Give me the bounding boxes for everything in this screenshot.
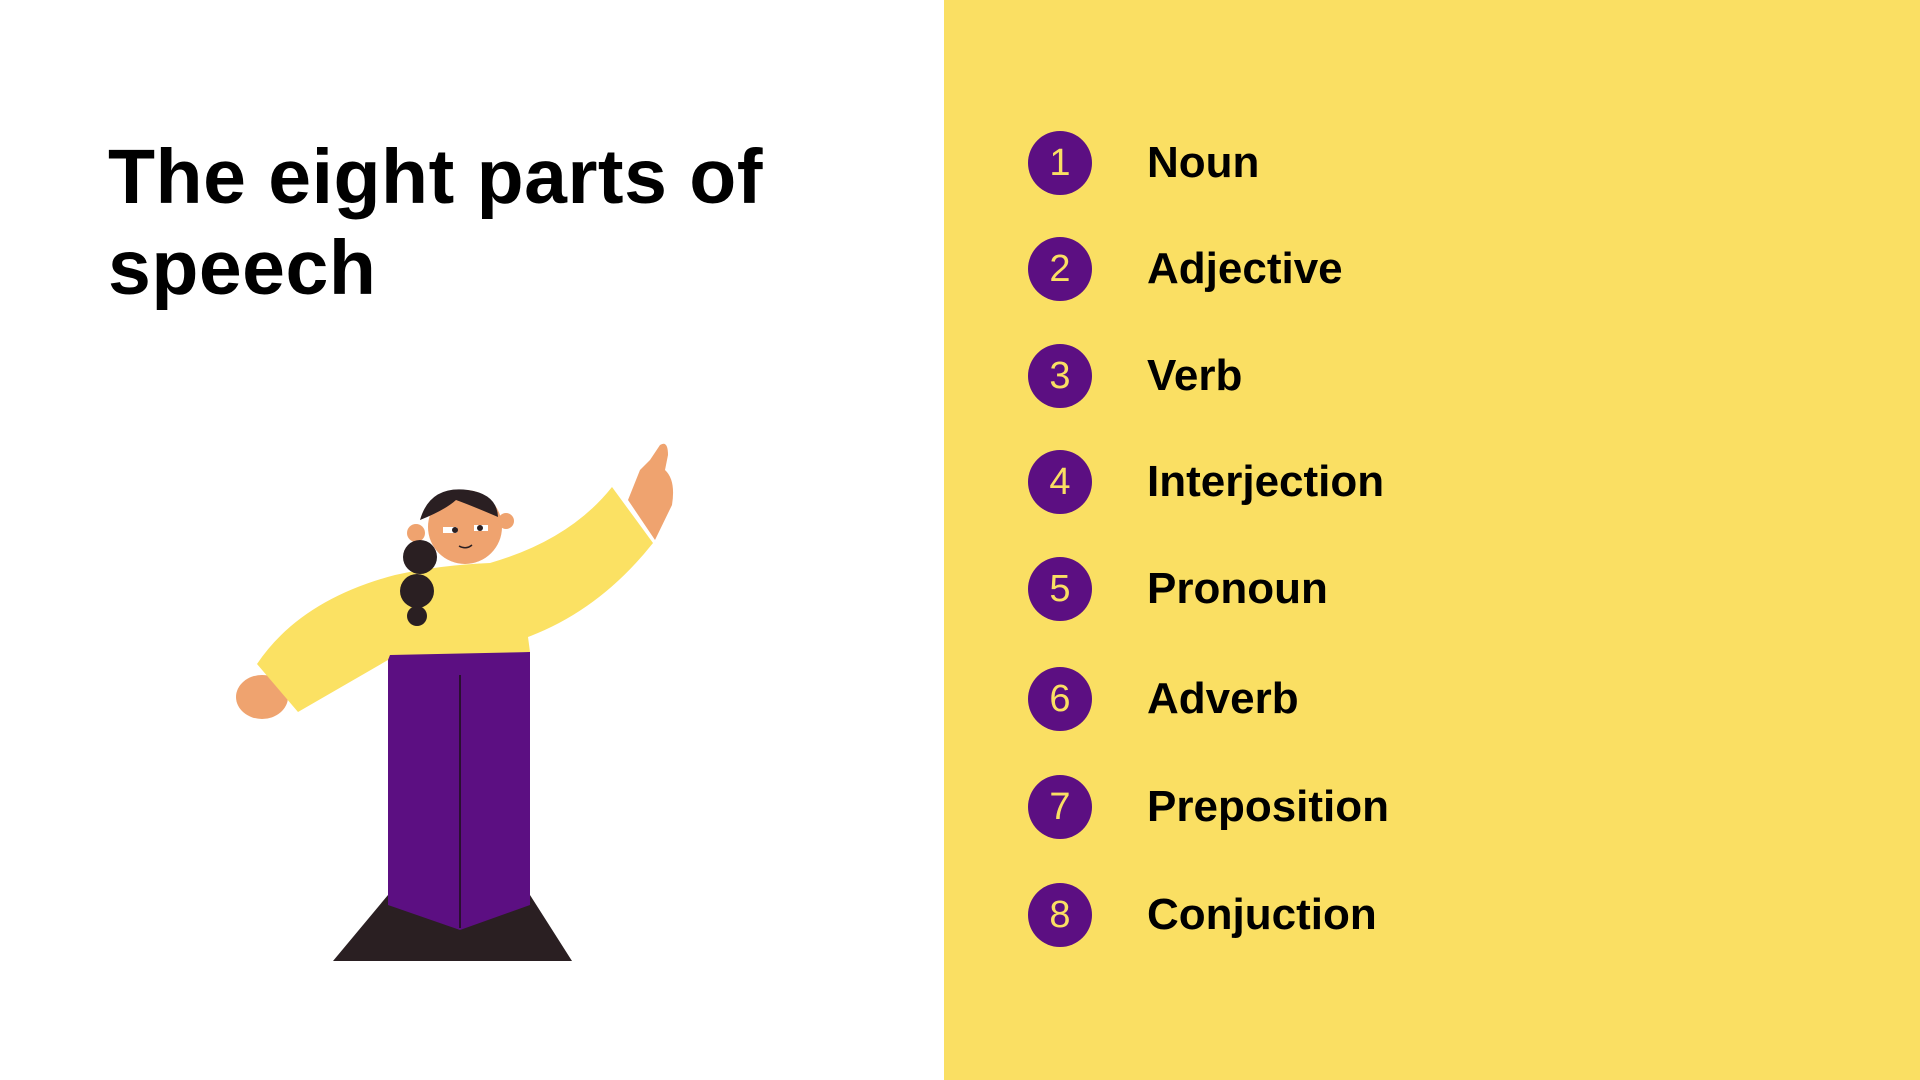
list item 6: Adverb (1147, 674, 1299, 723)
list item 5 (1028, 557, 1328, 621)
illustration: girl pointing (236, 444, 674, 961)
list item 8: Conjuction (1147, 890, 1377, 939)
list item 6 (1028, 667, 1299, 731)
title (108, 134, 763, 311)
head (428, 490, 502, 564)
list item 2: 2 (1049, 248, 1071, 290)
list item 8: 8 (1049, 894, 1071, 936)
panel: yellow list background (944, 0, 1920, 1080)
list item 1 (1028, 131, 1259, 195)
list item 3 (1028, 344, 1242, 408)
right hand (628, 444, 673, 540)
list item 1: 1 (1049, 142, 1071, 184)
list item 2: Adjective (1147, 244, 1343, 293)
list item 7: 7 (1049, 786, 1071, 828)
pants (388, 652, 530, 930)
left hand (236, 675, 288, 719)
list item 4: 4 (1049, 461, 1071, 503)
list item 1: Noun (1147, 138, 1259, 187)
list item 8 (1028, 883, 1377, 947)
list item 7: Preposition (1147, 782, 1389, 831)
shoes (333, 895, 572, 961)
list item 3: 3 (1049, 355, 1071, 397)
list item 5: 5 (1049, 568, 1071, 610)
list item 2 (1028, 237, 1343, 301)
list item 3: Verb (1147, 351, 1242, 400)
braid (403, 540, 437, 574)
list item 7 (1028, 775, 1389, 839)
list item 6: 6 (1049, 678, 1071, 720)
list item 5: Pronoun (1147, 564, 1328, 613)
list item 4: Interjection (1147, 457, 1384, 506)
title: The eight parts of (108, 134, 763, 220)
shirt (257, 487, 653, 712)
list item 4 (1028, 450, 1384, 514)
title: speech (108, 225, 376, 311)
